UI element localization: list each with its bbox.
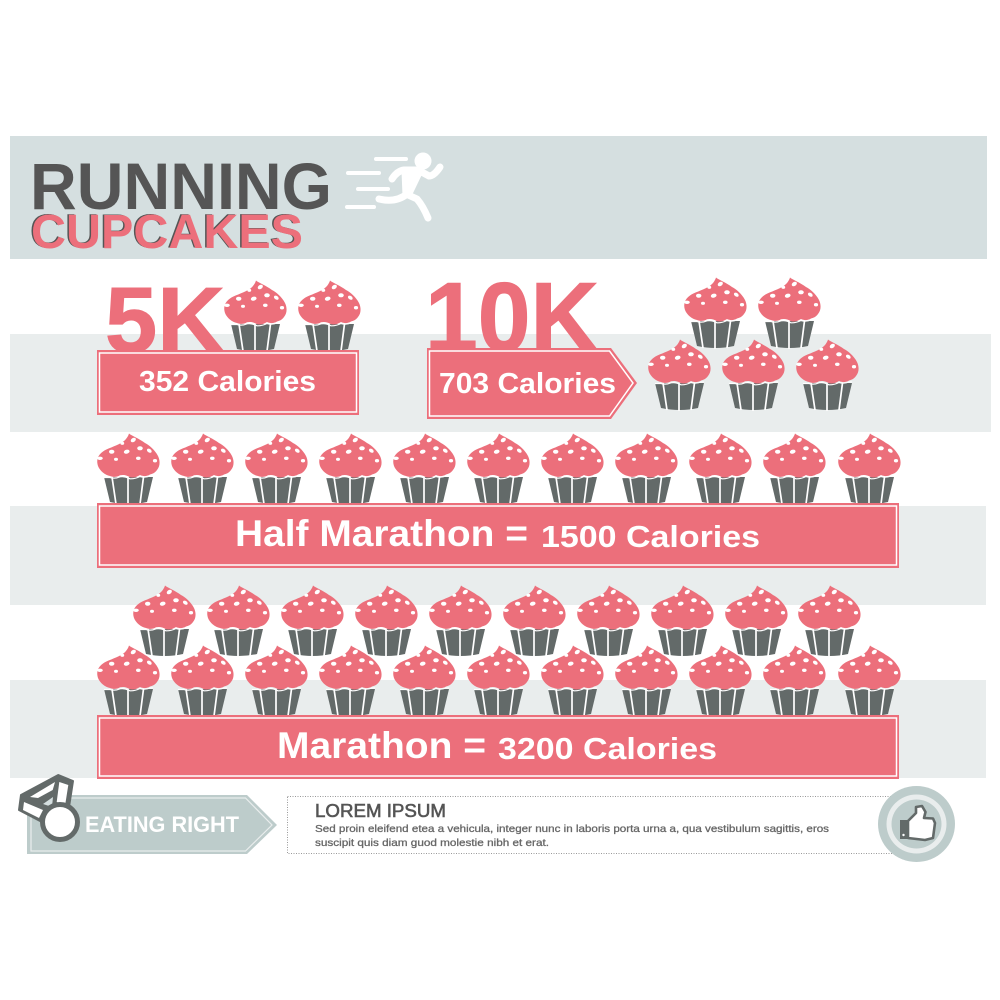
text heading: LOREM IPSUM xyxy=(315,801,446,821)
eating right arrow xyxy=(27,795,277,854)
marathon banner: Marathon = xyxy=(277,725,486,766)
10k cupcakes xyxy=(648,278,859,411)
half marathon cupcakes xyxy=(97,434,901,505)
half marathon banner: 1500 Calories xyxy=(541,519,760,554)
text body: Sed proin eleifend etea a vehicula, integer nunc in laboris porta urna a, qua vestibulum sagittis, eros xyxy=(315,823,829,835)
text box xyxy=(288,796,898,854)
marathon banner xyxy=(97,715,899,779)
title: cupcakes: CUPCAKES xyxy=(30,204,302,258)
half marathon banner xyxy=(97,503,899,568)
10k calories arrow banner: 703 Calories xyxy=(439,368,616,400)
icon: thumbs up badge xyxy=(878,786,955,862)
icon: running figure xyxy=(347,152,440,218)
marathon banner: 3200 Calories xyxy=(498,731,717,766)
5k calories banner: 352 Calories xyxy=(139,366,316,398)
5k heading: 5K xyxy=(105,268,225,372)
10k calories arrow banner xyxy=(427,348,637,419)
5k calories banner xyxy=(97,350,359,415)
5k cupcakes xyxy=(224,280,361,352)
text body: suscipit quis diam guod molestie nibh et erat. xyxy=(315,837,549,849)
icon: medal xyxy=(19,775,78,840)
eating right arrow: EATING RIGHT xyxy=(85,812,240,837)
band: 5k and 10k row xyxy=(10,334,991,432)
10k heading: 10K xyxy=(425,262,599,372)
title: cupcakes: CUPCAKES xyxy=(31,205,303,259)
marathon cupcakes xyxy=(97,586,901,717)
title: running: RUNNING xyxy=(30,149,332,223)
half marathon banner: Half Marathon = xyxy=(235,513,528,554)
text body xyxy=(315,823,829,849)
header band xyxy=(10,136,987,259)
band: marathon row xyxy=(10,680,986,778)
band: half marathon row xyxy=(10,506,986,605)
